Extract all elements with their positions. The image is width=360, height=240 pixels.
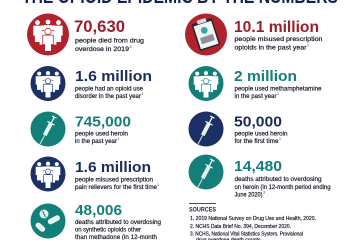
icon: red crowd (27, 14, 69, 56)
number: 1.6 million: 1.6 million (75, 68, 152, 85)
text: disorder description: disorder in the past year (75, 93, 142, 100)
icon: blue crowd (30, 66, 66, 101)
number: 70,630: 70,630 (74, 17, 125, 36)
number: 50,000: 50,000 (234, 114, 282, 130)
stat: 10.1 million prescription opioids (185, 14, 323, 56)
text: heroin deaths description (234, 176, 331, 198)
number: 745,000: 745,000 (75, 114, 131, 130)
text: first-time heroin description: 1 (279, 137, 281, 141)
text: died description: overdose in 2019 (75, 46, 129, 53)
text: methamphetamine description: people used methamphetamine (234, 86, 322, 92)
text: heroin deaths description: on heroin (in 12-month period ending (234, 184, 331, 191)
icon: red clipboard (185, 14, 227, 56)
number: 1.6 million: 1.6 million (75, 159, 151, 176)
sources list: 1. 2019 National Survey on Drug Use and Health, 2020. (190, 216, 316, 222)
text: misuse description: 1 (307, 44, 309, 48)
number: 48,006: 48,006 (75, 202, 122, 219)
stat: 2 million methamphetamine (188, 66, 322, 101)
text: disorder description (75, 86, 144, 100)
number: 10.1 million: 10.1 million (234, 19, 319, 36)
text: synthetic opioids description (75, 219, 161, 240)
icon: teal syringe (30, 112, 66, 146)
sources heading: SOURCES (189, 206, 216, 214)
text: died description (75, 38, 144, 53)
text: died description: 3 (130, 45, 132, 49)
text: pain relievers description (75, 176, 159, 191)
stat: 14,480 heroin deaths (188, 154, 331, 198)
icon: blue crowd (30, 156, 66, 192)
sources list: 2. NCHS Data Brief No. 394, December 2020. (190, 224, 291, 230)
sources list (190, 216, 316, 240)
stat: 50,000 first-time heroin (188, 112, 288, 146)
text: synthetic opioids description: on synthetic opioids other (75, 226, 142, 234)
text: misuse description: opioids in the past year (234, 44, 307, 52)
stat: 745,000 heroin (30, 112, 131, 146)
sources (189, 203, 316, 240)
text: heroin description (75, 130, 128, 145)
text: heroin description: people used heroin (75, 130, 128, 138)
icon: teal syringe (188, 154, 224, 190)
sources list: 3. NCHS, National Vital Statistics System. Provisional (190, 232, 303, 238)
text: misuse description (234, 36, 323, 52)
text: synthetic opioids description: deaths attributed to overdosing (75, 219, 161, 226)
text: first-time heroin description: people used heroin (234, 130, 288, 138)
text: misuse description: people misused prescription (234, 36, 323, 43)
number: 2 million: 2 million (234, 68, 297, 85)
text: methamphetamine description (234, 86, 322, 100)
stat: 48,006 synthetic opioids (30, 202, 161, 240)
text: disorder description: people had an opioid use (75, 86, 143, 92)
number: 14,480: 14,480 (234, 158, 282, 175)
text: pain relievers description: 1 (157, 183, 159, 187)
text: methamphetamine description: in the past year (234, 93, 277, 100)
text: died description: people died from drug (75, 38, 144, 44)
icon: teal crowd (188, 66, 224, 101)
text: heroin description: in the past year (75, 138, 118, 145)
text: first-time heroin description: for the first time (234, 138, 279, 145)
text: heroin deaths description: deaths attributed to overdosing (234, 176, 322, 183)
text: pain relievers description: pain relievers for the first time (75, 184, 157, 191)
text: pain relievers description: people misused prescription (75, 176, 153, 184)
stat: 70,630 deaths (27, 14, 144, 56)
text: heroin description: 1 (118, 137, 120, 141)
icon: blue syringe (188, 112, 224, 146)
text: methamphetamine description: 1 (277, 92, 279, 96)
icon: teal pills (30, 204, 66, 238)
text: disorder description: 1 (142, 92, 144, 96)
text: heroin deaths description: 3 (263, 190, 265, 194)
text: heroin deaths description: June 2020) (234, 192, 262, 198)
stat: 1.6 million misused pain relievers (30, 156, 159, 192)
text: first-time heroin description (234, 130, 288, 145)
stat: 1.6 million opioid use disorder (30, 66, 152, 101)
